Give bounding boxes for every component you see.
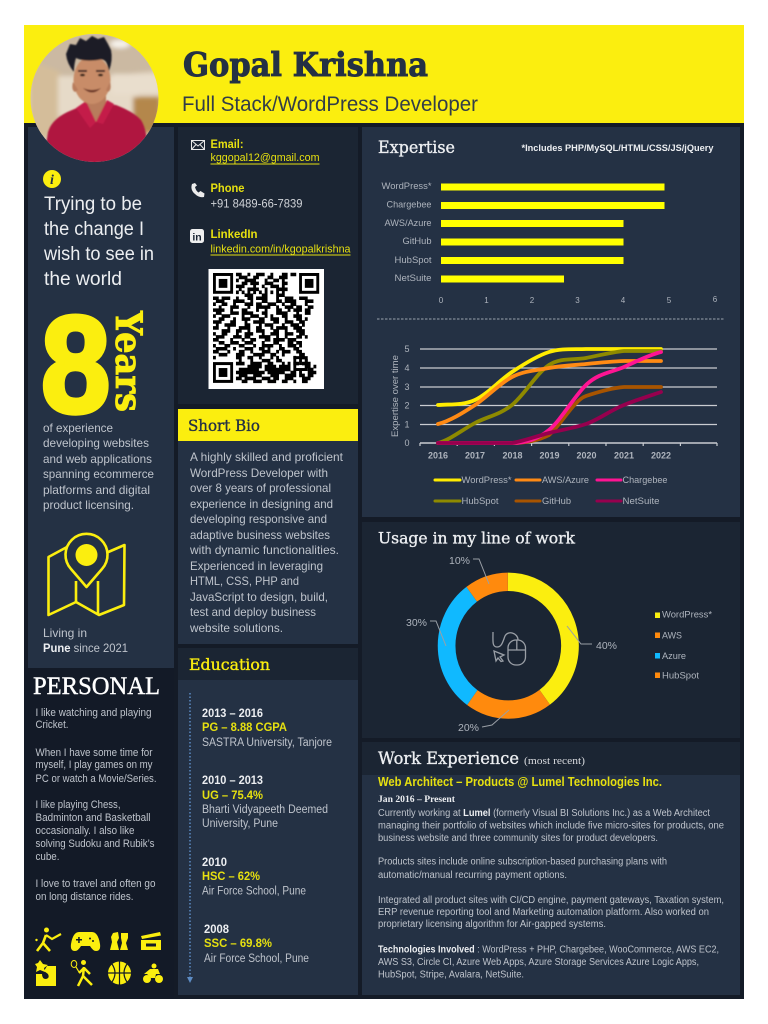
bio text: adaptive business websites: [190, 528, 330, 542]
job description: automatic/manual recurring payment options.: [378, 870, 567, 881]
personal text: solving Sudoku and Rubik’s: [36, 838, 155, 850]
location: Living in: [43, 626, 87, 640]
education: PG: SASTRA University, Tanjore: [202, 737, 332, 749]
personal text: Badminton and Basketball: [36, 812, 150, 824]
bar chart: 5: [667, 296, 672, 305]
personal text: Cricket.: [36, 719, 68, 731]
experience text: spanning ecommerce: [43, 467, 154, 481]
education: SSC: [204, 924, 309, 965]
name: Gopal Krishna: [183, 45, 428, 84]
education: UG: Bharti Vidyapeeth Deemed: [202, 804, 328, 816]
bar chart: GitHub: [402, 236, 432, 246]
location: Pune since 2021: [43, 641, 128, 655]
bio text: test and deploy business: [190, 605, 316, 619]
line chart legend: WordPress*: [462, 475, 512, 485]
personal text: When I have some time for: [36, 747, 153, 759]
line chart: 3: [404, 382, 410, 392]
icon: basketball: [108, 962, 131, 984]
bar chart: 4: [621, 296, 626, 305]
education: PG: 2013 – 2016: [202, 708, 263, 720]
personal text: I love to travel and often go: [36, 878, 156, 890]
education: PG: [202, 708, 332, 749]
bar chart: [382, 181, 718, 305]
bio text: JavaScript to design, build,: [190, 590, 328, 604]
email: Email:: [210, 137, 244, 151]
personal text: I like playing Chess,: [36, 799, 120, 811]
line chart: 2019: [540, 450, 560, 460]
note: *Includes PHP/MySQL/HTML/CSS/JS/jQuery: [522, 143, 714, 154]
job description: proprietary licensing algorithm for Air-gapped systems.: [378, 919, 606, 930]
icon: tennis: [71, 960, 92, 986]
icon: quad bike: [143, 964, 163, 983]
bio text: over 8 years of professional: [190, 481, 331, 495]
bio text: website solutions.: [189, 621, 283, 635]
job title: Web Architect – Products @ Lumel Technologies Inc.: [378, 775, 662, 789]
job description: ERP revenue reporting tool and Marketing automation platform. Also worked on: [378, 907, 709, 918]
line chart: 2: [404, 400, 410, 410]
phone: Phone: [210, 181, 245, 195]
heading: work experience: (most recent): [524, 756, 585, 767]
line chart: 2021: [614, 450, 634, 460]
line chart legend: [435, 475, 668, 506]
header band: [24, 25, 744, 123]
line chart legend: GitHub: [542, 496, 571, 506]
bio text: A highly skilled and proficient: [190, 450, 344, 464]
linkedin: [210, 227, 351, 256]
experience text: and web applications: [43, 452, 152, 466]
line chart: 2016: [428, 450, 448, 460]
bio text: HTML, CSS, PHP and: [190, 574, 299, 588]
email: [210, 137, 320, 164]
donut chart: [447, 582, 570, 710]
donut labels: 30%: [406, 617, 427, 629]
personal text: I like watching and playing: [36, 707, 152, 719]
education: UG: University, Pune: [202, 818, 278, 830]
job description: [378, 808, 724, 980]
job description: managing their portfolio of websites which include five micro-sites for products, one: [378, 820, 724, 832]
line chart: 2022: [651, 450, 671, 460]
panel: short bio: [178, 409, 358, 644]
icon: info: i: [50, 173, 54, 188]
bar chart: Chargebee: [386, 200, 432, 210]
bar chart: 1: [484, 296, 489, 305]
panel: usage: [362, 522, 740, 738]
personal text: on long distance rides.: [36, 891, 134, 903]
education: SSC: SSC – 69.8%: [204, 938, 272, 950]
icon: puzzle: [35, 960, 56, 986]
location: [43, 626, 128, 655]
donut labels: 20%: [458, 722, 479, 734]
bio text: experience in designing and: [190, 497, 333, 511]
donut legend: Azure: [662, 651, 686, 661]
education: UG: 2010 – 2013: [202, 775, 263, 787]
education: PG: PG – 8.88 CGPA: [202, 722, 287, 734]
experience text: product licensing.: [43, 498, 134, 512]
experience text: [43, 421, 154, 512]
line chart: 2020: [576, 450, 596, 460]
big number: 8 years: Years: [107, 310, 149, 412]
education: HSC: Air Force School, Pune: [202, 886, 306, 898]
line chart: [390, 344, 717, 460]
icon: mouse: [493, 632, 526, 665]
line chart: 4: [404, 363, 410, 373]
line chart legend: AWS/Azure: [542, 475, 589, 485]
job description: Currently working at Lumel (formerly Visual BI Solutions Inc.) as a Web Architect: [378, 808, 710, 819]
line chart legend: HubSpot: [462, 496, 499, 506]
icon: map with pin: [48, 534, 124, 615]
bar chart: 0: [439, 296, 444, 305]
line chart: 2018: [502, 450, 522, 460]
phone: +91 8489-66-7839: [210, 198, 302, 210]
timeline arrow: [187, 693, 193, 983]
job description: business website and three community sites for product developers.: [378, 833, 658, 844]
bar chart: 2: [530, 296, 535, 305]
line chart legend: NetSuite: [622, 496, 660, 506]
bar chart: 6: [713, 295, 718, 304]
donut legend: [655, 610, 713, 680]
line chart: Expertise over time: [390, 355, 400, 437]
experience text: platforms and digital: [43, 483, 150, 497]
experience text: of experience: [43, 421, 113, 435]
job description: Technologies Involved : WordPress + PHP, Chargebee, WooCommerce, AWS EC2,: [378, 944, 719, 956]
personal text: PC or watch a Movie/Series.: [36, 773, 156, 785]
icon: phone: [191, 183, 204, 197]
bar chart: NetSuite: [394, 273, 432, 283]
job dates: Jan 2016 – Present: [378, 794, 455, 804]
bar chart: 3: [575, 296, 580, 305]
job title: Full Stack/WordPress Developer: [182, 93, 478, 116]
experience text: developing websites: [43, 436, 149, 450]
job description: HubSpot, Stripe, Avalara, NetSuite.: [378, 970, 524, 980]
job description: Products sites include online subscription-based purchasing plans with: [378, 856, 667, 868]
big number: 8 years: 8: [41, 287, 110, 441]
icon: clapperboard: [141, 932, 161, 950]
linkedin: linkedin.com/in/kgopalkrishna: [210, 244, 351, 256]
line chart: 2017: [465, 450, 485, 460]
email: kggopal12@gmail.com: [210, 152, 320, 164]
icon: gamepad: [71, 932, 100, 951]
panel: contact: [178, 127, 358, 404]
donut labels: 10%: [449, 555, 470, 567]
icon: linkedin: [190, 229, 204, 244]
personal text: [36, 707, 156, 903]
line chart: 5: [404, 344, 410, 354]
education: SSC: 2008: [204, 924, 230, 936]
bio text: Experienced in leveraging: [190, 559, 323, 573]
heading: work experience: Work Experience: [378, 749, 519, 769]
panel: education: [178, 648, 358, 995]
panel: work experience: [362, 742, 740, 995]
icon: envelope: [192, 140, 204, 150]
icon: info: [43, 170, 61, 188]
quote: Trying to be: [44, 194, 142, 215]
personal text: myself, I play games on my: [36, 759, 153, 771]
personal text: occasionally. I also like: [36, 825, 134, 837]
bio text: [189, 450, 344, 635]
heading: short bio: Short Bio: [188, 416, 260, 435]
QR code: [208, 269, 324, 389]
quote: the world: [44, 269, 122, 290]
education: HSC: 2010: [202, 857, 227, 869]
line chart: 1: [404, 420, 410, 430]
education: UG: [202, 775, 328, 830]
panel: intro column: [28, 127, 174, 668]
heading: expertise: Expertise: [378, 138, 455, 158]
panel: personal: [24, 668, 174, 999]
quote: wish to see in: [43, 244, 154, 265]
donut legend: AWS: [662, 630, 682, 640]
quote: the change I: [44, 219, 144, 240]
panel: expertise: [362, 127, 740, 517]
personal text: cube.: [36, 851, 60, 863]
icon: linkedin: in: [192, 232, 202, 244]
icon: cricket: [35, 928, 61, 951]
line chart legend: Chargebee: [622, 475, 668, 485]
education: SSC: Air Force School, Pune: [204, 953, 309, 965]
big number: 8 years: [41, 287, 149, 441]
profile photo: [30, 33, 160, 170]
heading: personal: PERSONAL: [33, 673, 160, 700]
bio text: with dynamic functionalities.: [189, 543, 339, 557]
icon: chess: [110, 932, 128, 950]
bar chart: WordPress*: [382, 181, 432, 191]
education: HSC: HSC – 62%: [202, 871, 260, 883]
heading: usage: Usage in my line of work: [378, 528, 575, 548]
linkedin: LinkedIn: [210, 227, 258, 241]
job description: AWS S3, Circle CI, Azure Web Apps, Azure Storage Services Azure Logic Apps,: [378, 957, 699, 968]
donut legend: WordPress*: [662, 610, 713, 620]
bio text: developing responsive and: [190, 512, 327, 526]
bar chart: AWS/Azure: [384, 218, 432, 228]
quote: [43, 194, 154, 290]
education: HSC: [202, 857, 306, 898]
donut legend: HubSpot: [662, 670, 700, 680]
donut labels: 40%: [596, 640, 617, 652]
job description: Integrated all product sites with CI/CD engine, payment gateways, Taxation system,: [378, 895, 724, 906]
donut labels: [406, 555, 617, 734]
education: UG: UG – 75.4%: [202, 790, 263, 802]
bar chart: HubSpot: [394, 255, 432, 265]
bio text: WordPress Developer with: [190, 466, 328, 480]
line chart: 0: [404, 438, 410, 448]
phone: [210, 181, 302, 210]
heading: education: Education: [189, 655, 270, 674]
